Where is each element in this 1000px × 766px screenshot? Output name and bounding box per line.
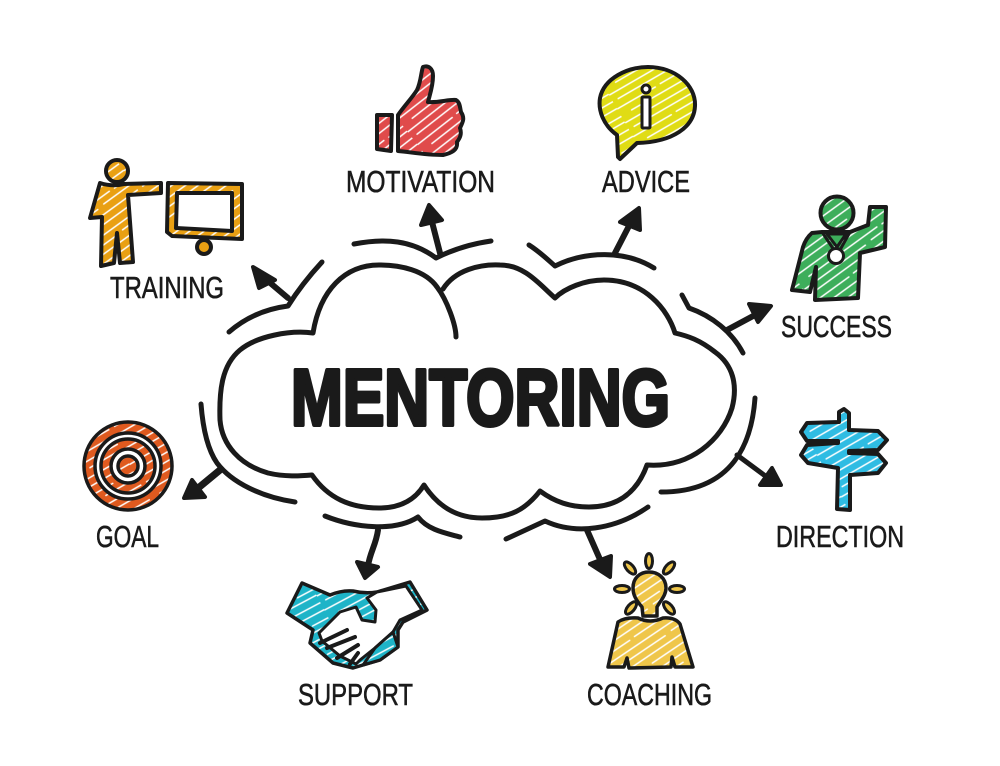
speech bubble: [600, 67, 695, 159]
screen knob: [197, 240, 211, 254]
icon: advice speech bubble: [600, 67, 695, 159]
label: coaching: COACHING: [587, 677, 712, 712]
icon: coaching person with light bulb: [608, 554, 693, 668]
label: direction: DIRECTION: [776, 519, 904, 554]
target bullseye: [118, 456, 138, 476]
heading: mentoring: MENTORING: [291, 353, 670, 442]
handshake main shape: [287, 582, 427, 668]
target white ring: [95, 433, 161, 499]
icon: goal target: [84, 422, 172, 510]
panel: central cloud: [220, 265, 734, 518]
arrow: to motivation: [421, 205, 442, 253]
arrow: to success: [727, 304, 771, 330]
arrow: to advice: [615, 208, 640, 253]
target outer ring: [84, 422, 172, 510]
presenter head: [106, 160, 128, 182]
teal cuff edge: [363, 632, 398, 665]
label: goal: GOAL: [96, 519, 159, 554]
info stem: [642, 97, 650, 128]
icon: direction signpost: [801, 409, 887, 510]
arrow: to coaching: [587, 530, 611, 577]
info dot: [642, 85, 650, 93]
icon: training presenter and screen: [90, 160, 242, 266]
person head: [820, 196, 854, 230]
medal disc: [828, 248, 844, 264]
bulb rays: [614, 554, 684, 616]
icon: success person with medal: [792, 196, 886, 300]
thumb cuff: [377, 115, 392, 151]
label: success: SUCCESS: [781, 309, 892, 344]
cloud outline: [220, 265, 734, 518]
arrow: to direction: [737, 455, 781, 485]
icon: thumbs up: [377, 66, 463, 155]
white hand and sleeve: [319, 586, 422, 664]
label: training: TRAINING: [110, 270, 224, 305]
arrow: to support: [357, 530, 378, 578]
outer contour lines around the cloud: [201, 241, 755, 539]
label: support: SUPPORT: [298, 677, 413, 712]
presentation screen: [167, 183, 242, 239]
target middle ring: [101, 439, 155, 493]
arrow: to goal: [184, 470, 220, 498]
arrow: to training: [253, 267, 288, 298]
icon: support handshake: [287, 582, 427, 668]
light bulb: [633, 572, 666, 616]
label: motivation: MOTIVATION: [346, 164, 495, 199]
target inner white ring: [111, 449, 145, 483]
person torso: [608, 618, 693, 668]
person body: [792, 207, 886, 300]
thumb hand: [398, 66, 463, 155]
fingers: [320, 630, 358, 664]
medal: [822, 232, 850, 250]
presenter body: [90, 183, 161, 266]
label: advice: ADVICE: [602, 164, 690, 199]
